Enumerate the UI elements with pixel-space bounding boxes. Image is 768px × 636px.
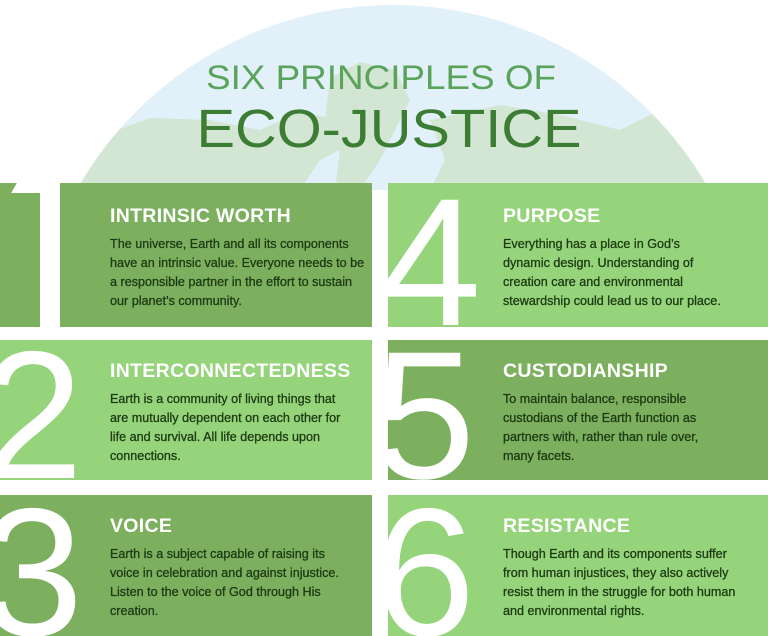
text: Everything has a place in God’s (503, 237, 680, 251)
text: Earth is a subject capable of raising its voice in celebration and against injustice. Listen to the voice of God through His creation. (110, 547, 339, 618)
panel: 3 voice (0, 495, 372, 636)
text (110, 205, 364, 308)
text: RESISTANCE (503, 515, 630, 537)
text (503, 360, 698, 463)
title (196, 59, 582, 159)
text: VOICE (110, 515, 172, 537)
text: Earth is a community of living things that are mutually dependent on each other for life and survival. All life depends upon connections. (110, 392, 340, 463)
text: Though Earth and its components suffer from human injustices, they also actively resist them in the struggle for both human and environmental rights. (503, 547, 735, 618)
text: dynamic design. Understanding of (503, 256, 693, 270)
panel: 4 purpose (388, 183, 768, 327)
text: stewardship could lead us to our place. (503, 294, 721, 308)
title: ECO-JUSTICE (196, 99, 582, 159)
globe (80, 5, 706, 190)
panel: 1 intrinsic worth (0, 183, 372, 327)
title: SIX PRINCIPLES OF (206, 59, 556, 97)
numeral 1 (11, 183, 60, 327)
text: creation care and environmental (503, 275, 683, 289)
text: PURPOSE (503, 205, 600, 227)
text (110, 515, 339, 618)
text: To maintain balance, responsible custodians of the Earth function as partners with, rather than rule over, many facets. (503, 392, 698, 463)
panel: 2 interconnectedness (0, 340, 372, 480)
panel: 5 custodianship (388, 340, 768, 480)
text: The universe, Earth and all its components have an intrinsic value. Everyone needs to be a responsible partner in the effort to sustain our planet’s community. (110, 237, 364, 308)
panel: 6 resistance (388, 495, 768, 636)
text: CUSTODIANSHIP (503, 360, 668, 382)
text (503, 515, 735, 618)
globe background with title (80, 5, 706, 190)
text (110, 360, 351, 463)
text: INTERCONNECTEDNESS (110, 360, 351, 382)
text: INTRINSIC WORTH (110, 205, 291, 227)
text (503, 205, 721, 308)
